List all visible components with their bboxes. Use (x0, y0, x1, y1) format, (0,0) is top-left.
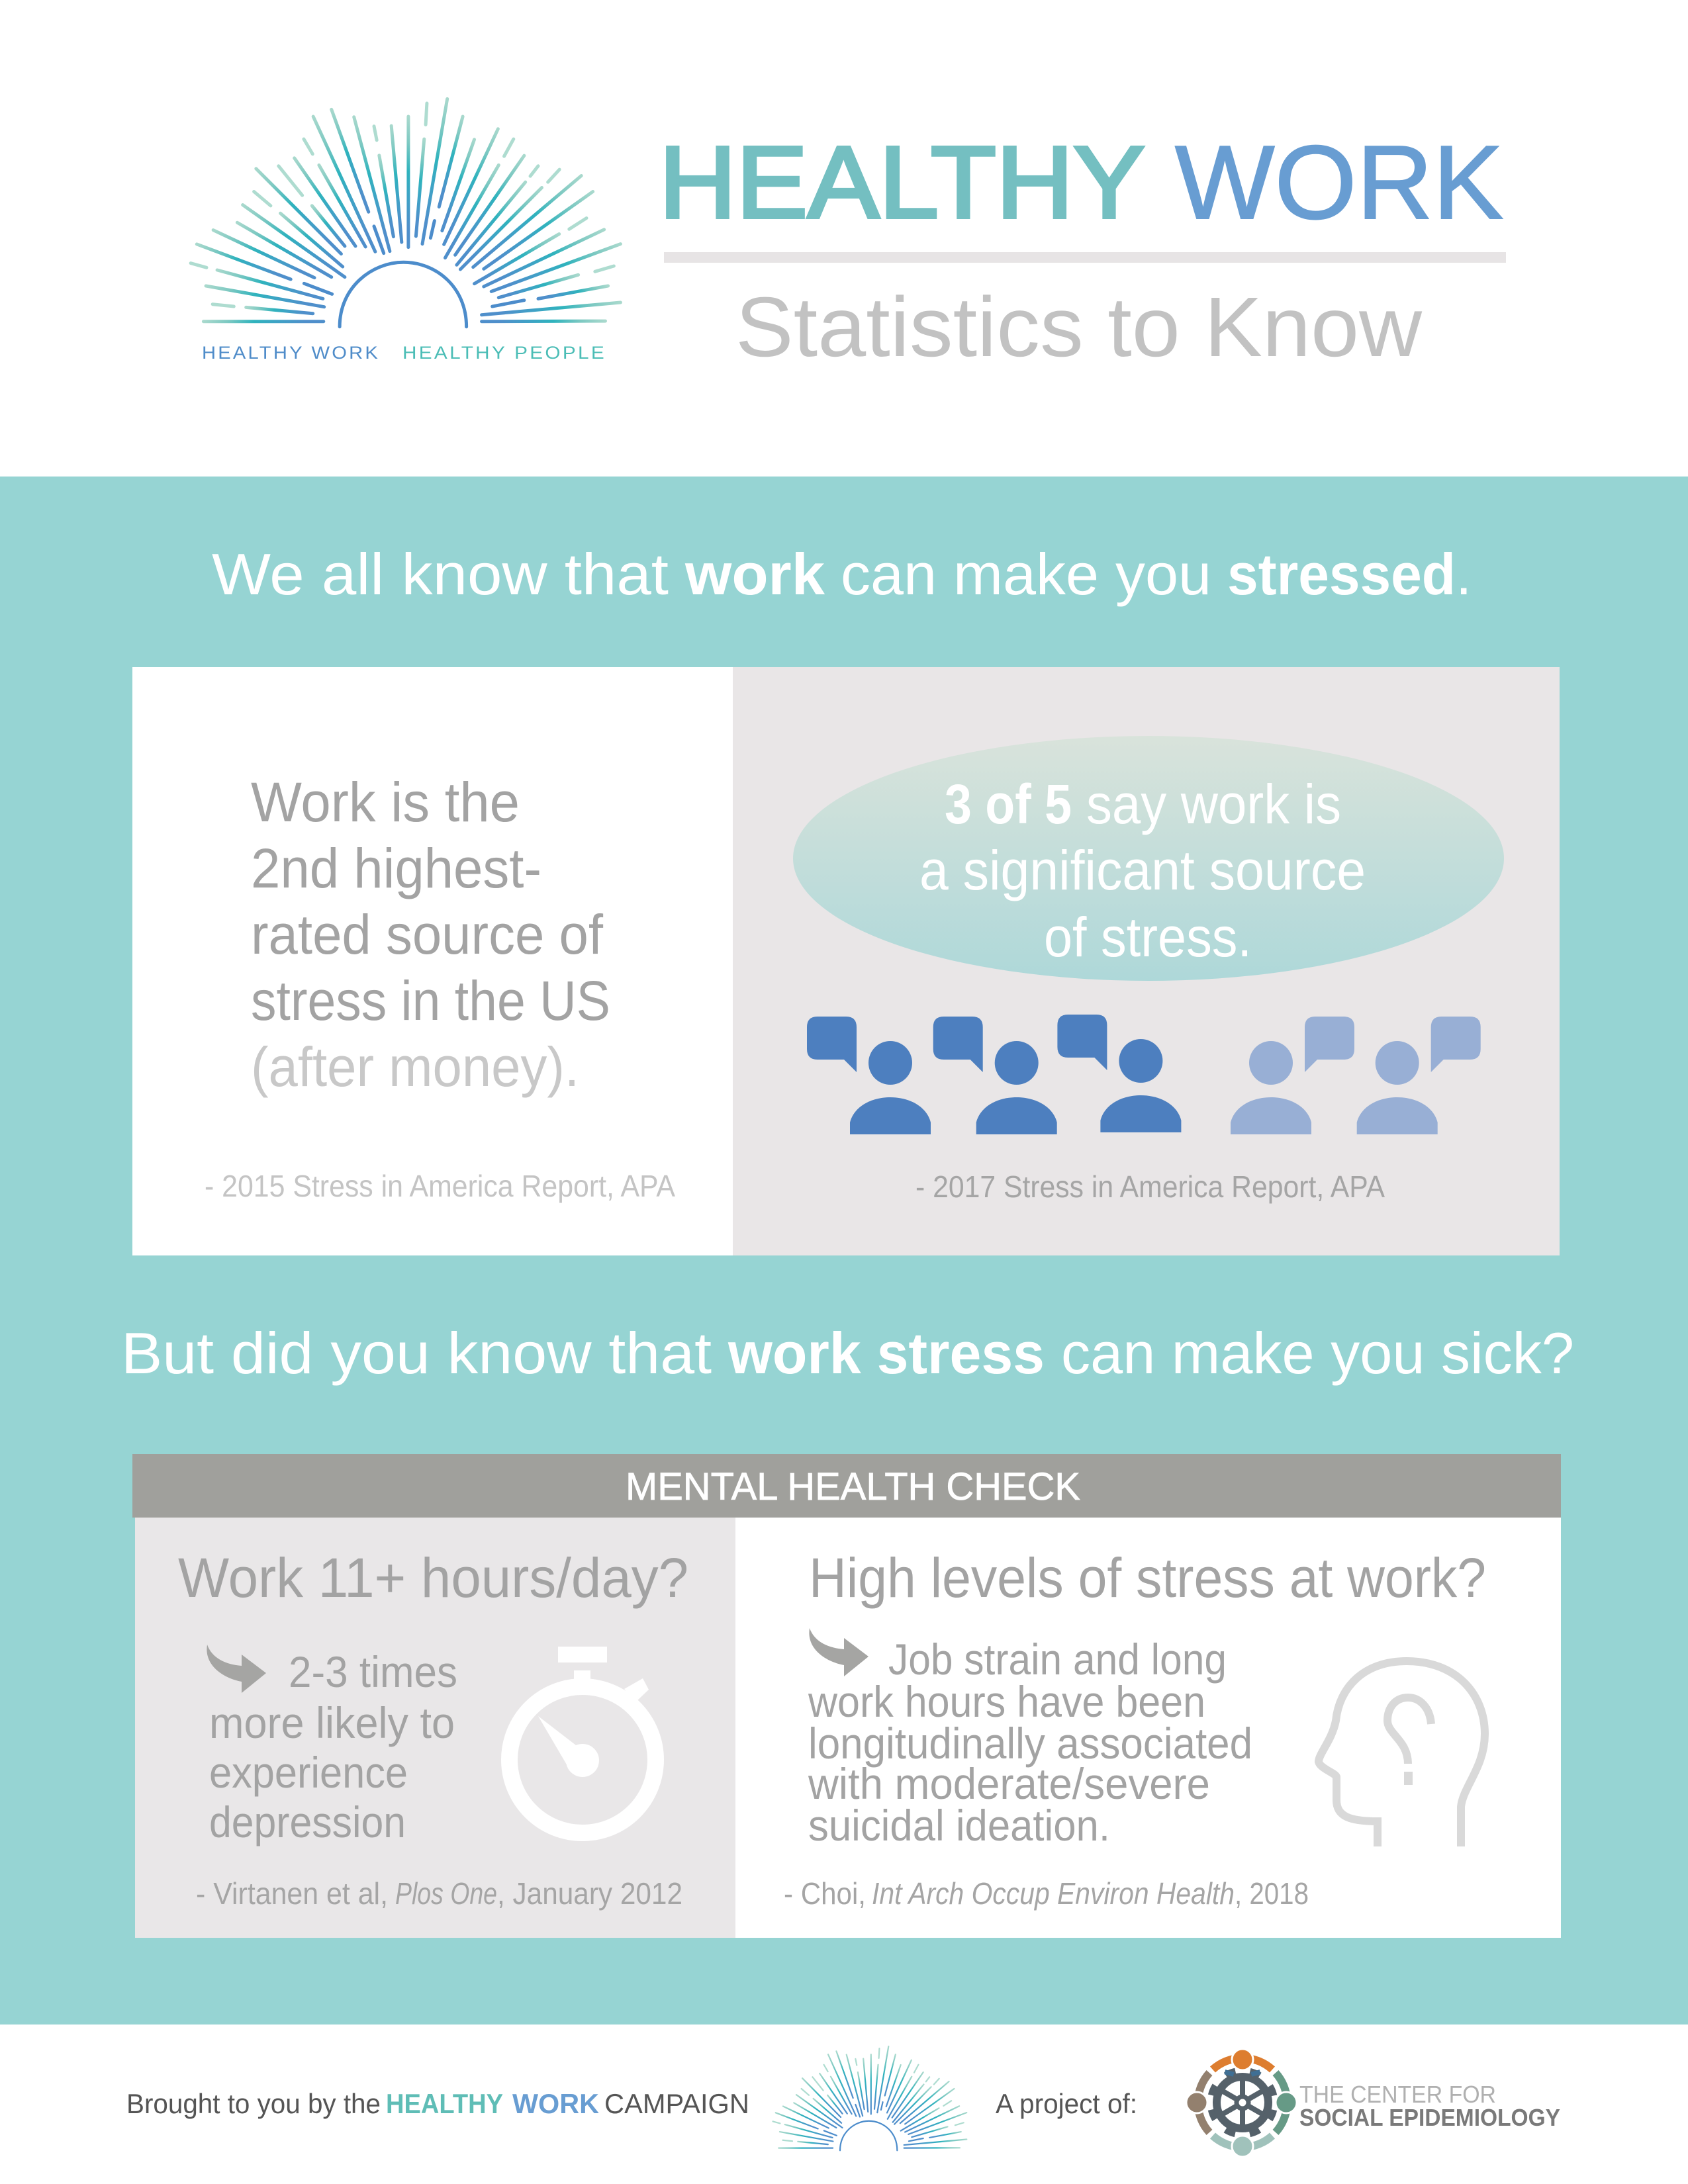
logo tagline: healthy people: HEALTHY PEOPLE (402, 343, 606, 363)
citation: - 2015 Stress in America Report, APA (205, 1169, 675, 1203)
person 2 (933, 1017, 1057, 1134)
panel heading: High levels of stress at work? (809, 1547, 1486, 1609)
icon: stopwatch (510, 1647, 655, 1833)
panel: mental health check header (132, 1454, 1561, 1518)
subtitle: Statistics to Know (735, 280, 1423, 375)
panel: second highest source of stress (132, 667, 733, 1255)
person 3 (1057, 1015, 1181, 1132)
statistic text: with moderate/severe (808, 1759, 1210, 1808)
logo text: THE CENTER FOR (1299, 2081, 1496, 2108)
panel: 3 of 5 say work is a source of stress (733, 667, 1560, 1255)
heading: work can make you stressed: stressed (1227, 541, 1456, 607)
statistic text: suicidal ideation. (808, 1801, 1110, 1850)
logo tagline: healthy work: HEALTHY WORK (202, 343, 380, 363)
header text: MENTAL HEALTH CHECK (626, 1465, 1080, 1508)
citation: Plos One (395, 1876, 497, 1911)
brought to you by text: Brought to you by the (126, 2088, 381, 2119)
logo rays (191, 99, 620, 327)
brought to you by text (126, 2088, 749, 2119)
statistic text: more likely to (209, 1698, 455, 1747)
logo: small sunburst (773, 2046, 966, 2150)
statistic text: Work is the (251, 771, 520, 833)
heading: work can make you stressed: work (684, 541, 825, 607)
citation: Int Arch Occup Environ Health (872, 1876, 1235, 1911)
citation: , 2018 (1235, 1876, 1309, 1911)
panel background (132, 667, 733, 1255)
oval callout (793, 736, 1504, 981)
citation: - 2017 Stress in America Report, APA (915, 1169, 1385, 1204)
brought to you by text: CAMPAIGN (604, 2088, 749, 2119)
logo ring segments (1198, 2058, 1287, 2147)
brought to you by text: HEALTHY (386, 2088, 503, 2119)
callout text: of stress. (1044, 906, 1252, 968)
person 5 (1357, 1017, 1481, 1134)
heading: work can make you stressed: . (1456, 541, 1472, 607)
panel background (135, 1518, 735, 1938)
statistic text: rated source of (251, 903, 604, 966)
logo: center for social epidemiology (1186, 2049, 1560, 2157)
person 1 (807, 1017, 931, 1134)
heading: work stress can make you sick: But did you know that (121, 1320, 712, 1386)
callout text: a significant source (919, 839, 1366, 901)
arrow (809, 1628, 868, 1676)
footer: credits (126, 2046, 1560, 2157)
citation: - Choi, (784, 1876, 866, 1911)
arrow (207, 1645, 266, 1693)
logo: Healthy Work sunburst (191, 99, 620, 363)
heading: work stress can make you sick (121, 1320, 1574, 1386)
panel background (735, 1518, 1561, 1938)
panel: teal background band (0, 477, 1688, 2025)
statistic text: (after money). (251, 1036, 579, 1098)
statistic text: work hours have been (808, 1677, 1205, 1726)
citation: , January 2012 (497, 1876, 682, 1911)
statistic text: Job strain and long (888, 1635, 1227, 1684)
logo gear (1210, 2070, 1275, 2135)
logo: center for social epidemiology: SOCIAL EPIDEMIOLOGY (1299, 2104, 1560, 2131)
callout text: say work is (1086, 773, 1341, 835)
icon: head with question mark (1319, 1661, 1485, 1846)
statistic text: 2nd highest- (251, 837, 541, 899)
callout text (919, 773, 1366, 968)
header bar (132, 1454, 1561, 1518)
heading: work can make you stressed: can make you (841, 541, 1211, 607)
statistic text (808, 1635, 1252, 1850)
panel background (733, 667, 1560, 1255)
statistic text (209, 1647, 457, 1846)
statistic text (251, 771, 610, 1098)
title word: work: WORK (1175, 124, 1503, 241)
statistic text: experience (209, 1748, 408, 1797)
person 4 (1231, 1017, 1354, 1134)
title (659, 124, 1506, 375)
panel: high levels of stress at work (735, 1518, 1561, 1938)
callout text: 3 of 5 (945, 773, 1072, 835)
panel heading: Work 11+ hours/day? (178, 1547, 688, 1609)
heading: work can make you stressed: We all know that (212, 541, 669, 607)
panel: work 11+ hours per day (135, 1518, 735, 1938)
heading: work stress can make you sick: can make you sick? (1061, 1320, 1574, 1386)
heading: work can make you stressed (212, 541, 1472, 607)
title rule (664, 252, 1506, 263)
heading: work stress can make you sick: work stress (727, 1320, 1045, 1386)
title word: healthy: HEALTHY (659, 126, 1145, 240)
icon: five people with speech bubbles (807, 1015, 1481, 1134)
statistic text: depression (209, 1797, 406, 1846)
logo nodes (1186, 2049, 1297, 2157)
project of text: A project of: (996, 2088, 1137, 2119)
statistic text: 2-3 times (289, 1647, 457, 1696)
statistic text: longitudinally associated (808, 1719, 1252, 1768)
brought to you by text: WORK (512, 2088, 599, 2119)
citation: - Virtanen et al, (196, 1876, 388, 1911)
statistic text: stress in the US (251, 970, 610, 1032)
citation (196, 1876, 682, 1911)
